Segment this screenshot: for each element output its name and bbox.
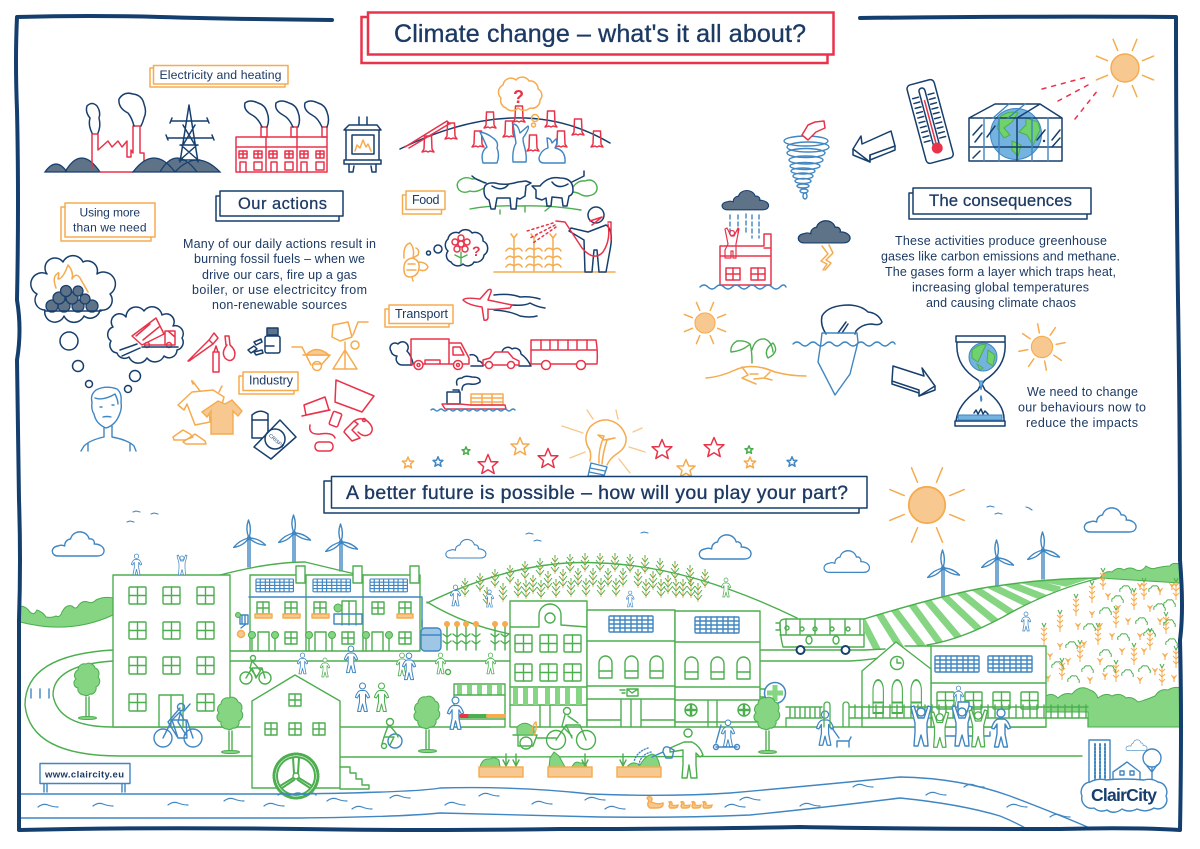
trees	[217, 696, 780, 754]
icon: power station and coal heaps	[45, 93, 220, 172]
label: using more than we need	[61, 203, 155, 241]
icons: can and crisp packet: CRISPS	[267, 433, 285, 450]
title: Climate change – what's it all about?	[394, 20, 806, 48]
arrow: right	[892, 366, 935, 396]
icon: cargo bike with vegetables	[513, 708, 596, 750]
icon: big sun	[890, 468, 964, 542]
label: electricity and heating: Electricity and heating	[160, 68, 282, 82]
road network	[25, 650, 1082, 757]
people on apartment roof	[131, 554, 187, 575]
logo: ClairCity	[1081, 740, 1167, 812]
building: gabled shop with striped awning	[510, 601, 587, 727]
label: the consequences heading	[909, 188, 1091, 219]
icon: thought bubble with question mark: ?	[513, 87, 524, 107]
label: the consequences heading: The consequences	[929, 191, 1072, 210]
icons: laptop, tv, phone, game controller	[302, 380, 374, 451]
text block: change behaviours: reduce the impacts	[1026, 416, 1138, 430]
icons: can and crisp packet	[252, 411, 296, 459]
river	[20, 777, 1092, 829]
label: using more than we need: than we need	[73, 220, 146, 234]
label: our actions heading: Our actions	[238, 195, 327, 213]
icon: cyclist blue	[154, 704, 202, 747]
text block: the consequences: The gases form a layer which traps heat,	[885, 265, 1116, 279]
icon: hourglass with earth	[955, 336, 1005, 426]
icon: thinking man	[81, 387, 136, 451]
cyclists	[154, 656, 596, 750]
icon: cows in a field	[457, 171, 597, 214]
hedge: lower right	[1046, 687, 1181, 727]
text block: the consequences: These activities produce greenhouse	[895, 234, 1107, 248]
title	[362, 12, 834, 63]
label: using more than we need: Using more	[80, 206, 140, 220]
text block: change behaviours: our behaviours now to	[1018, 400, 1146, 414]
pedestrians	[297, 646, 834, 747]
text block: the consequences: and causing climate chaos	[926, 296, 1076, 310]
logo: ClairCity: ClairCity	[1091, 785, 1157, 805]
icon: pharmacy sign	[760, 682, 786, 704]
text block: our actions: drive our cars, fire up a gas	[202, 268, 357, 282]
label: food	[402, 191, 445, 214]
heading: a better future	[324, 476, 867, 513]
carrot field	[1041, 568, 1179, 686]
text block: our actions	[183, 237, 376, 312]
icon: light bulb with rays	[562, 410, 645, 476]
icon: water wheel	[274, 754, 318, 798]
icon: aeroplane with trails	[463, 289, 545, 320]
planters	[479, 752, 661, 777]
icon: wood stove	[344, 117, 381, 172]
arrow: left	[853, 131, 895, 162]
field worker	[1021, 612, 1031, 631]
icon: cyclist green	[240, 656, 271, 684]
icon: tornado with car	[784, 121, 829, 199]
striped field	[862, 574, 1100, 655]
icon: electricity pylon	[166, 105, 214, 162]
text block: the consequences: gases like carbon emissions and methane.	[881, 250, 1120, 264]
text block: our actions: non-renewable sources	[212, 298, 347, 312]
website sign	[40, 764, 130, 792]
icon: cargo ship	[431, 376, 515, 411]
icon: lorry, car, bus and smoke	[390, 339, 597, 370]
icon: polar bear on melting iceberg	[793, 305, 895, 395]
building: pharmacy	[675, 611, 760, 727]
icon: scooter, dog and football	[446, 670, 851, 750]
label: electricity and heating	[150, 66, 288, 87]
label: our actions heading	[216, 191, 343, 221]
text block: change behaviours	[1018, 385, 1146, 430]
building: water mill	[252, 675, 369, 798]
icon: sun shining on greenhouse	[1042, 39, 1154, 119]
stall customer	[447, 697, 464, 729]
icon: sun by hourglass	[1016, 321, 1068, 373]
building: apartment block	[113, 575, 230, 727]
market stall	[454, 684, 505, 727]
icon: drought with seedling	[684, 302, 806, 384]
crowd cheering with speaker	[911, 686, 1010, 747]
icon: thought bubble with question mark	[499, 77, 542, 127]
website sign: www.claircity.eu	[44, 770, 124, 780]
hedge: top right	[1100, 563, 1180, 583]
wind turbines	[233, 515, 1060, 597]
stars	[402, 438, 797, 477]
label: industry	[239, 372, 298, 394]
text block: our actions: Many of our daily actions result in	[183, 237, 376, 251]
icon: tram car	[421, 620, 441, 651]
label: food: Food	[412, 193, 440, 207]
text block: the consequences: increasing global temperatures	[912, 280, 1089, 294]
building: terraced houses with solar panels	[236, 566, 422, 651]
thought bubble: burning rubbish	[31, 256, 115, 322]
railings and wall	[786, 702, 1088, 727]
text block: change behaviours: We need to change	[1027, 385, 1138, 399]
icon: earth in a greenhouse	[969, 104, 1062, 161]
thought bubble circles	[60, 332, 140, 392]
icon: bee thinking of a flower	[404, 230, 488, 281]
icon: bee thinking of a flower: ?	[472, 243, 481, 259]
hedge: left	[20, 597, 113, 627]
icons: cosmetics and medicine	[188, 328, 280, 372]
icons: wheelbarrow and cement mixer	[292, 322, 368, 370]
icon: deforested hill with rabbits	[400, 77, 610, 163]
stepped path by river	[278, 793, 316, 795]
icon: tree left	[74, 663, 100, 720]
label: industry: Industry	[249, 374, 294, 388]
icon: flooded house and rain cloud	[700, 190, 786, 289]
icon: storm cloud with lightning	[798, 221, 850, 270]
text block: our actions: boiler, or use electricitcy from	[192, 283, 367, 297]
text block: our actions: burning fossil fuels – when we	[194, 252, 365, 266]
icons: clothes and shoes	[173, 381, 242, 444]
sky: clouds and birds	[52, 506, 1136, 572]
farmers on the hill	[450, 578, 731, 607]
icon: ducks	[647, 797, 712, 808]
bus	[776, 619, 864, 654]
label: transport	[385, 305, 453, 327]
building: post office	[587, 610, 675, 727]
icon: wheelchair user	[382, 718, 402, 748]
icon: smoking terraced houses	[236, 101, 328, 172]
thought bubble: truck dumping rubbish	[108, 307, 183, 363]
icon: person watering planter	[634, 729, 703, 778]
heading: a better future: A better future is possible – how will you play your part?	[346, 482, 848, 504]
label: transport: Transport	[395, 307, 449, 321]
building: school with clock	[862, 642, 1046, 727]
flowers	[443, 621, 509, 650]
icon: thermometer	[906, 79, 954, 164]
text block: the consequences	[881, 234, 1120, 310]
icon: corn sprayed by farmer	[494, 207, 615, 272]
crops on the hill	[461, 553, 709, 606]
background hills	[220, 562, 797, 634]
